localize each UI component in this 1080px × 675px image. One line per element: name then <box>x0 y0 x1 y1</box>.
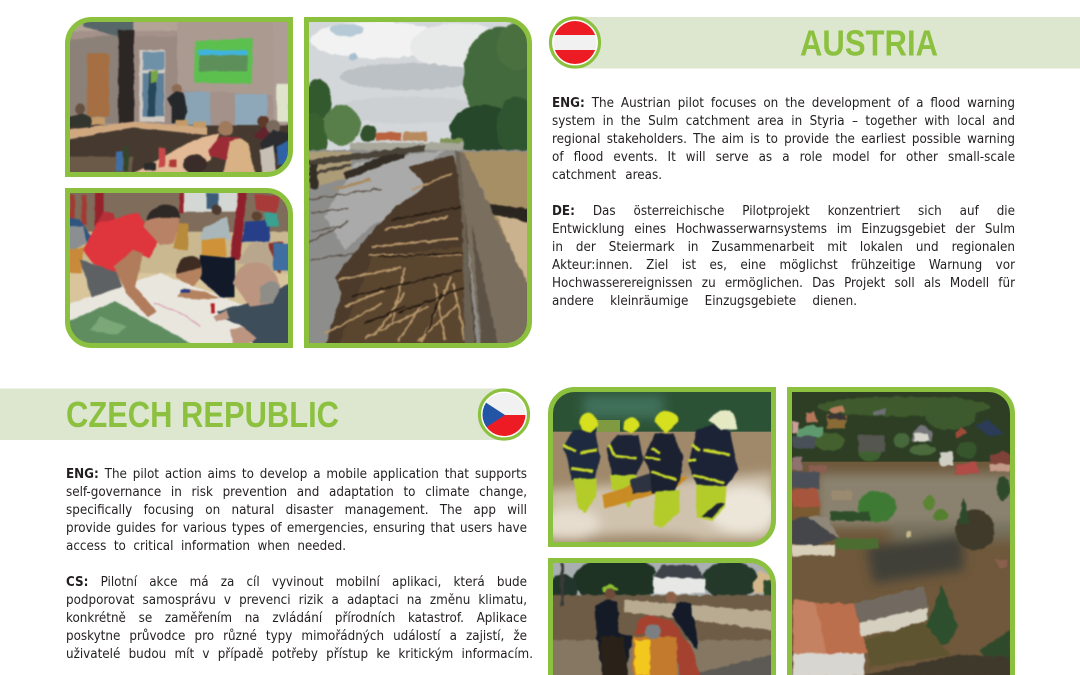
icon: Austrian flag <box>550 18 600 67</box>
heading: AUSTRIA: AUSTRIA <box>800 22 938 64</box>
text block: Czech Republic Czech: uživatelé budou mít v případě potřeby přístup ke kritickým informacím. <box>66 647 533 662</box>
flood water base <box>790 390 1023 675</box>
text block: Austria German <box>552 204 1016 309</box>
frame: map workshop photo border <box>68 190 290 346</box>
sky, trees and horizon <box>309 22 527 152</box>
photo: stakeholders working on a map <box>70 193 288 343</box>
text block: Austria German: Akteur:innen. Ziel ist es, eine möglichst frühzeitige Warnung vor <box>552 258 1015 273</box>
icon: Czech flag <box>480 390 530 439</box>
frame: meeting room photo border <box>68 20 290 174</box>
four firefighters and stretcher <box>563 410 738 528</box>
text block: Czech Republic English: provide guides for various types of emergencies, ensuring that users have <box>66 521 527 536</box>
text block: Austria English <box>552 96 1015 183</box>
text block: Czech Republic Czech: CS: Pilotní akce má za cíl vyvinout mobilní aplikaci, která bude <box>66 575 527 590</box>
text block: Czech Republic English: specifically focusing on natural disaster management. The app will <box>66 503 527 518</box>
text block: Austria English: of flood events. It will serve as a role model for other small-scale <box>552 150 1015 165</box>
water, debris and railing <box>305 145 538 350</box>
heading band: Austria <box>575 17 1080 68</box>
text block: Austria English: system in the Sulm catchment area in Styria – together with local and <box>552 114 1015 129</box>
text block: Czech Republic Czech <box>66 575 533 662</box>
photo: firefighters carrying a stretcher <box>553 392 771 542</box>
text block: Czech Republic English: access to critical information when needed. <box>66 539 346 554</box>
photo: meeting room <box>70 22 288 172</box>
heading band: Czech Republic <box>0 388 505 440</box>
text block: Czech Republic Czech: podporovat samosprávu v prevenci rizik a adaptaci na změnu klimatu, <box>66 593 527 608</box>
frame: rescuers photo border <box>550 560 774 675</box>
text block: Austria German: Entwicklung eines Hochwasserwarnsystems im Einzugsgebiet der Sulm <box>552 222 1015 237</box>
forest and flood water background <box>553 392 771 542</box>
text block: Austria German: DE: Das österreichische Pilotprojekt konzentriert sich auf die <box>552 204 1015 219</box>
frame: flooded village photo border <box>790 390 1012 675</box>
text block: Austria English: regional stakeholders. The aim is to provide the earliest possible warning <box>552 132 1015 147</box>
text block: Czech Republic Czech: poskytne průvodce pro různé typy mimořádných událostí a zajistí, že <box>66 629 527 644</box>
text block: Austria English: catchment areas. <box>552 168 662 183</box>
photo: aerial view of flooded village <box>790 390 1023 675</box>
text block: Czech Republic English: ENG: The pilot action aims to develop a mobile application that supports <box>66 467 527 482</box>
text block: Czech Republic English: self-governance in risk prevention and adaptation to climate change, <box>66 485 527 500</box>
frame: flood debris photo border <box>306 20 530 346</box>
photo: flood debris at weir <box>309 22 527 343</box>
text block: Austria German: andere kleinräumige Einzugsgebiete dienen. <box>552 294 857 309</box>
text block: Austria English: ENG: The Austrian pilot focuses on the development of a flood warning <box>552 96 1015 111</box>
village houses, trees and flooded yards <box>792 397 1011 675</box>
heading: CZECH REPUBLIC: CZECH REPUBLIC <box>66 394 339 435</box>
text block: Austria German: in der Steiermark in Zusammenarbeit mit lokalen und regionalen <box>552 240 1015 255</box>
text block: Austria German: Hochwasserereignissen zu ermöglichen. Das Projekt soll als Modell für <box>552 276 1015 291</box>
frame: firefighters photo border <box>550 390 774 544</box>
text block: Czech Republic Czech: konkrétně se zaměřením na zvládání přírodních katastrof. Aplikace <box>66 611 527 626</box>
text block: Czech Republic English <box>66 467 527 554</box>
photo: rescuers with water pump <box>553 563 771 675</box>
